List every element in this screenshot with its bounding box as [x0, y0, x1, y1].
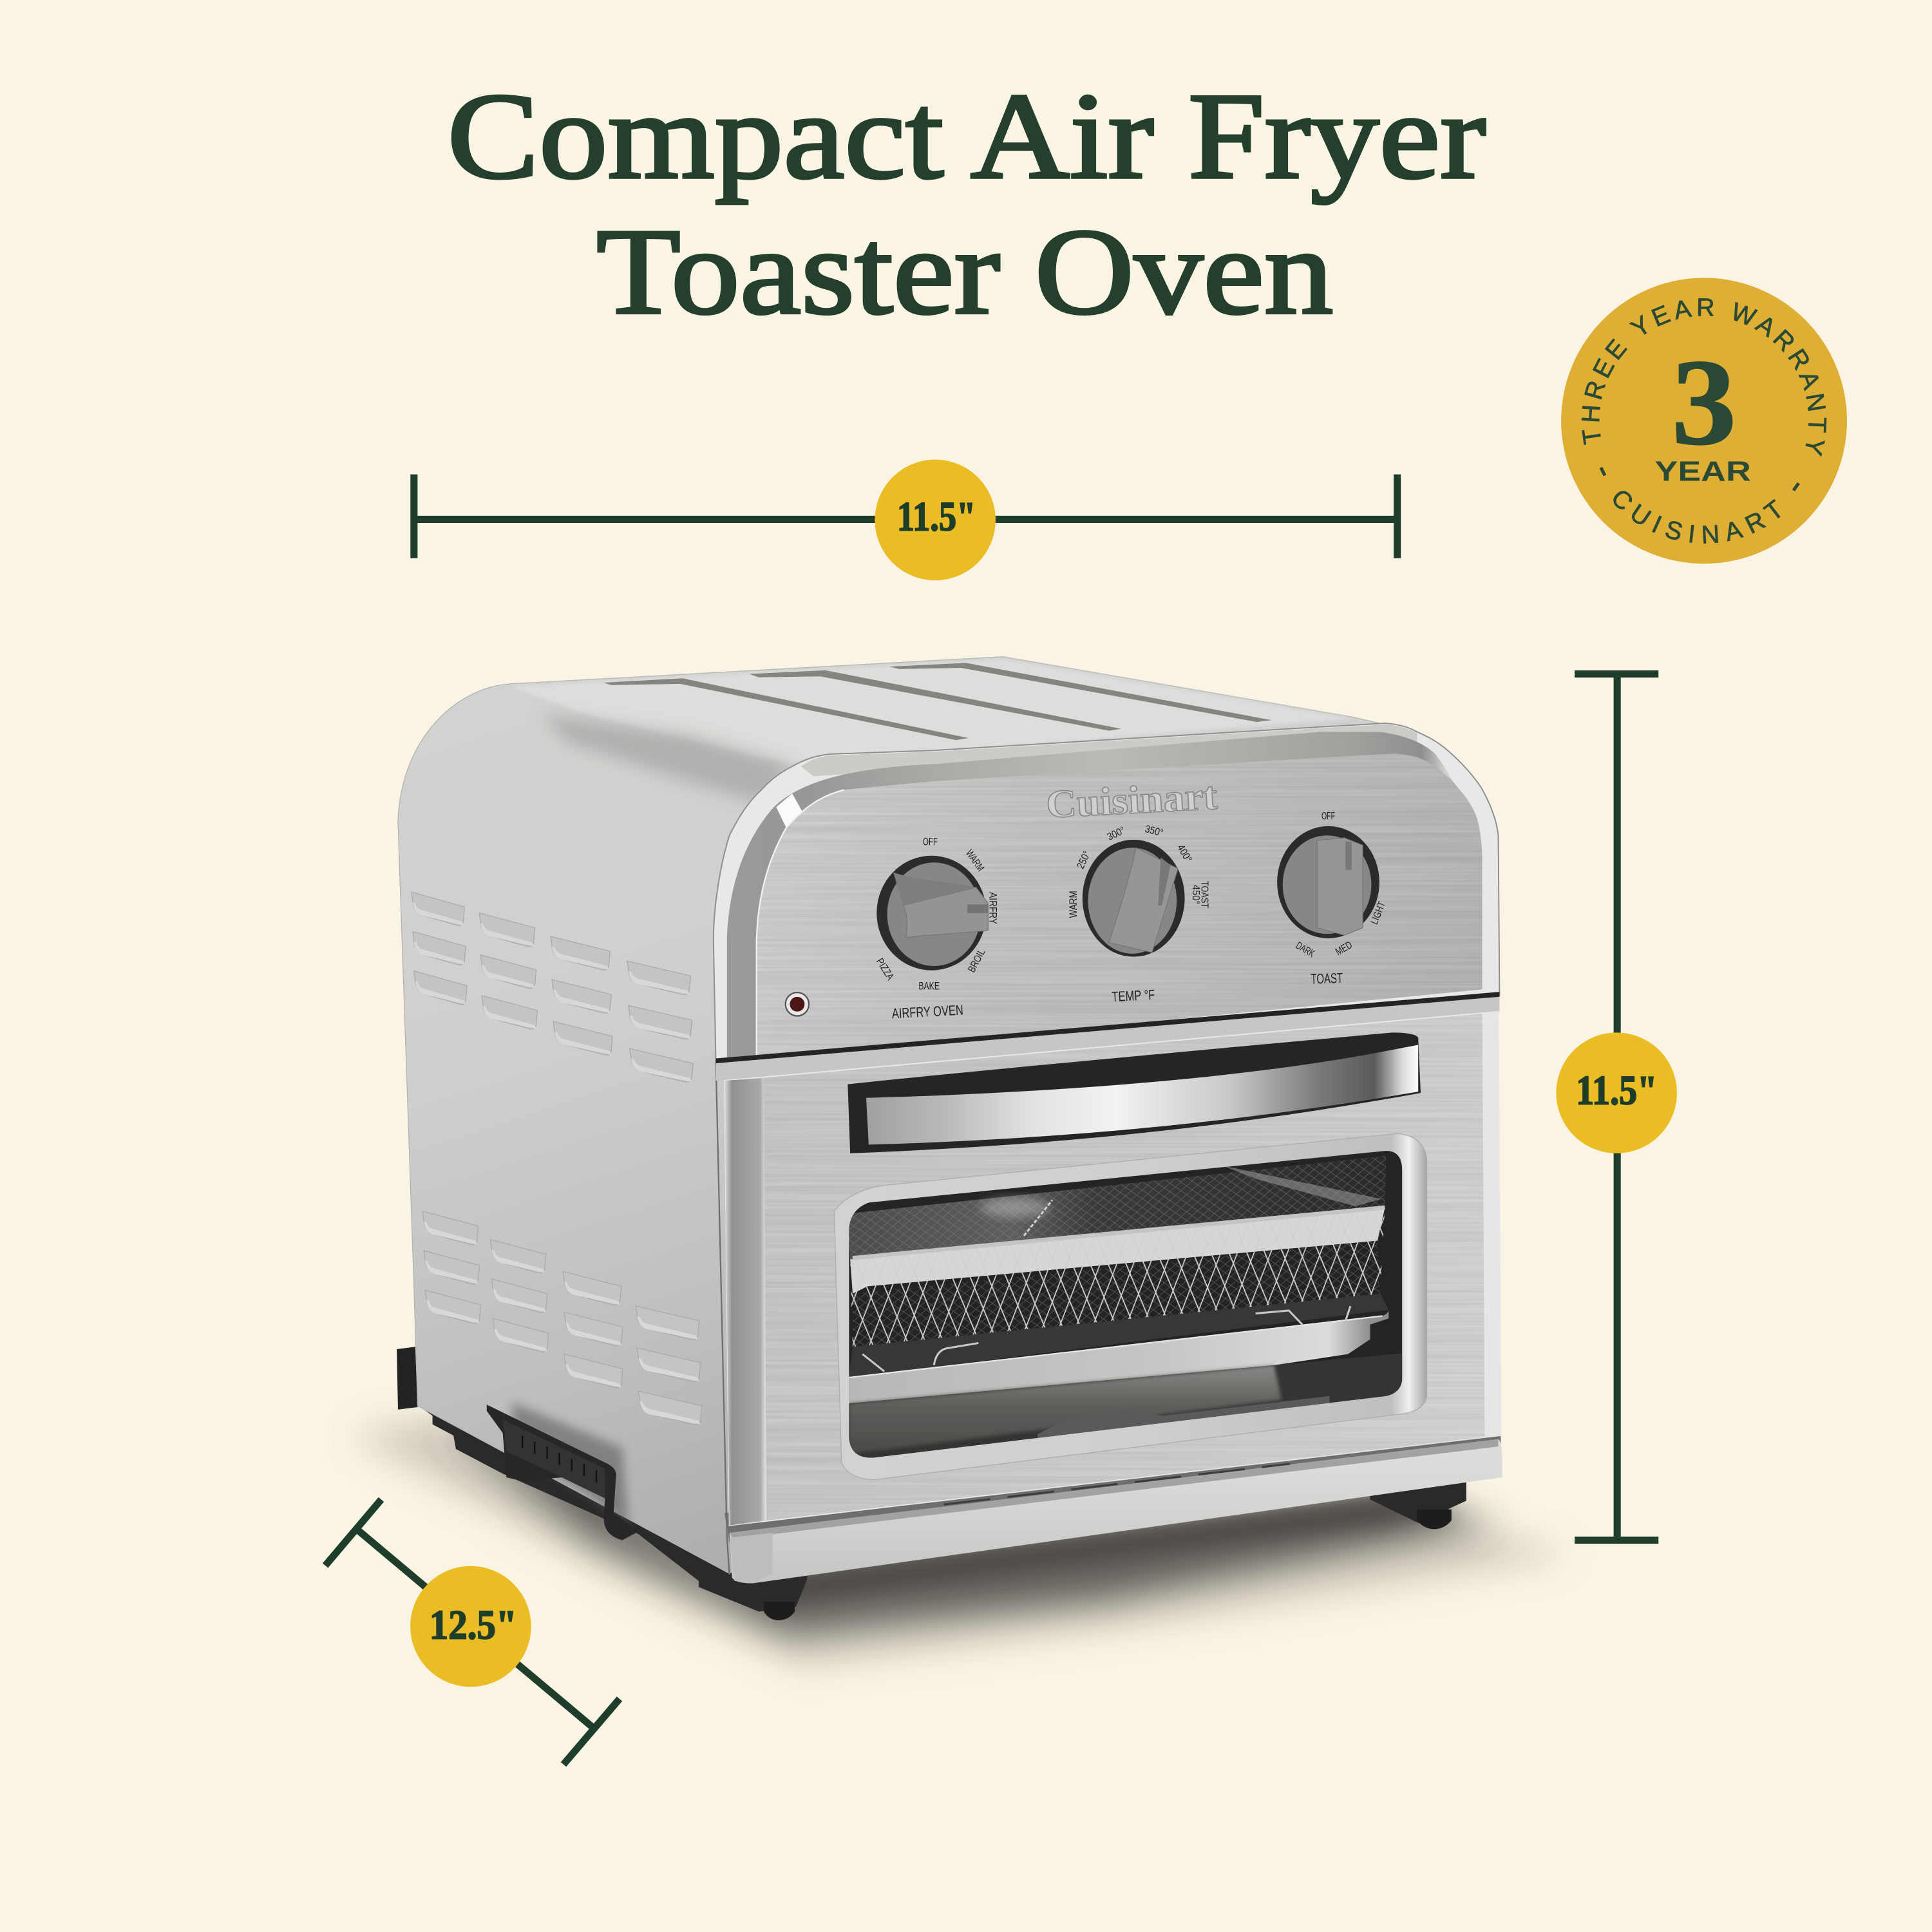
- warranty badge: YEAR: [1655, 457, 1751, 488]
- front edge shadow line: [716, 936, 730, 1575]
- seam behind door bottom: [724, 1427, 1501, 1542]
- dial labels: airfry oven: WARM: [963, 848, 986, 873]
- trim upper soft band: [801, 724, 1417, 776]
- door handle: [848, 1032, 1421, 1153]
- dial labels: temperature: 400°: [1175, 842, 1194, 864]
- tray legs: [862, 1306, 1350, 1371]
- tray: [849, 1294, 1388, 1378]
- dial labels: toast: LIGHT: [1368, 900, 1388, 926]
- width dimension line: [414, 460, 1397, 580]
- gasket and trim strip: [716, 992, 1499, 1081]
- dial labels: temperature: 450°: [1190, 885, 1201, 904]
- dial labels: toast: OFF: [1321, 810, 1335, 822]
- dial labels: temperature: 250°: [1075, 849, 1093, 871]
- dial labels: toast: TOAST: [1311, 970, 1343, 987]
- power indicator light: [786, 992, 809, 1016]
- ground shadow: [351, 1417, 1571, 1666]
- trim highlight left corner: [776, 793, 802, 828]
- back plug block: [397, 1347, 418, 1410]
- dial labels: airfry oven: BROIL: [966, 947, 988, 974]
- basket interior: [850, 1208, 1385, 1294]
- upper control panel trim: [714, 723, 1499, 1062]
- dial labels: airfry oven: AIRFRY: [987, 892, 998, 924]
- warranty badge: 3: [1672, 334, 1736, 471]
- knob: toast: [1277, 826, 1379, 938]
- title: Toaster Oven: [596, 204, 1333, 340]
- side and top body: [398, 657, 1499, 1573]
- base seam segments: [944, 1464, 1290, 1504]
- cord wrap handle: [487, 1402, 638, 1540]
- dial labels: temperature: [1068, 823, 1209, 1005]
- oven floor: [849, 1353, 1407, 1466]
- window interior: [838, 1146, 1417, 1466]
- black base and feet: [419, 1406, 1466, 1620]
- side vents lower: [422, 1211, 702, 1425]
- warranty badge: - CUISINART -: [1600, 466, 1800, 544]
- dial labels: temperature: TEMP °F: [1112, 987, 1155, 1005]
- dial labels: airfry oven: BAKE: [918, 980, 940, 992]
- cuisinart logo: Cuisinart: [1045, 774, 1218, 827]
- panel edge highlight: [757, 790, 844, 1059]
- width dimension line: 11.5": [897, 494, 976, 540]
- dial labels: temperature: 300°: [1105, 824, 1127, 843]
- title: Compact Air Fryer: [448, 69, 1486, 205]
- title: [448, 69, 1486, 340]
- dial labels: airfry oven: OFF: [923, 837, 938, 848]
- warranty badge: [1561, 278, 1847, 564]
- dial labels: airfry oven: [874, 836, 998, 1021]
- depth dimension line: [325, 1499, 620, 1765]
- dial labels: toast: DARK: [1294, 940, 1317, 960]
- basket front wires: [850, 1208, 1385, 1347]
- brushed door texture: [761, 1010, 1488, 1528]
- height dimension line: 11.5": [1576, 1067, 1657, 1113]
- brushed front panel: [752, 746, 1491, 1066]
- top bend shadow: [542, 715, 795, 803]
- window frame: [834, 1133, 1427, 1480]
- knob: airfry oven selector: [876, 856, 988, 971]
- warranty badge: THREE YEAR WARRANTY: [1582, 298, 1826, 457]
- upper rear mesh: [848, 1156, 1386, 1259]
- dial labels: toast: MED: [1334, 939, 1354, 958]
- door right edge: [1482, 1012, 1501, 1438]
- knob: temperature: [1083, 840, 1185, 957]
- dial labels: airfry oven: AIRFRY OVEN: [891, 1002, 963, 1021]
- dial labels: temperature: TOAST: [1198, 881, 1209, 908]
- depth dimension line: 12.5": [430, 1602, 517, 1649]
- door left chamfer: [724, 1078, 766, 1526]
- top slots: [604, 663, 1271, 740]
- dial labels: toast: [1294, 810, 1388, 987]
- toaster oven: [397, 657, 1502, 1620]
- side vents upper: [412, 892, 693, 1082]
- dial labels: temperature: WARM: [1068, 891, 1079, 918]
- base plinth: [730, 1439, 1502, 1584]
- dial labels: airfry oven: PIZZA: [874, 956, 896, 982]
- top surface: [510, 659, 1353, 764]
- dial labels: temperature: 350°: [1144, 823, 1164, 839]
- height dimension line: [1556, 674, 1677, 1540]
- trim grey band: [727, 732, 1482, 1062]
- oven door: [724, 1010, 1501, 1542]
